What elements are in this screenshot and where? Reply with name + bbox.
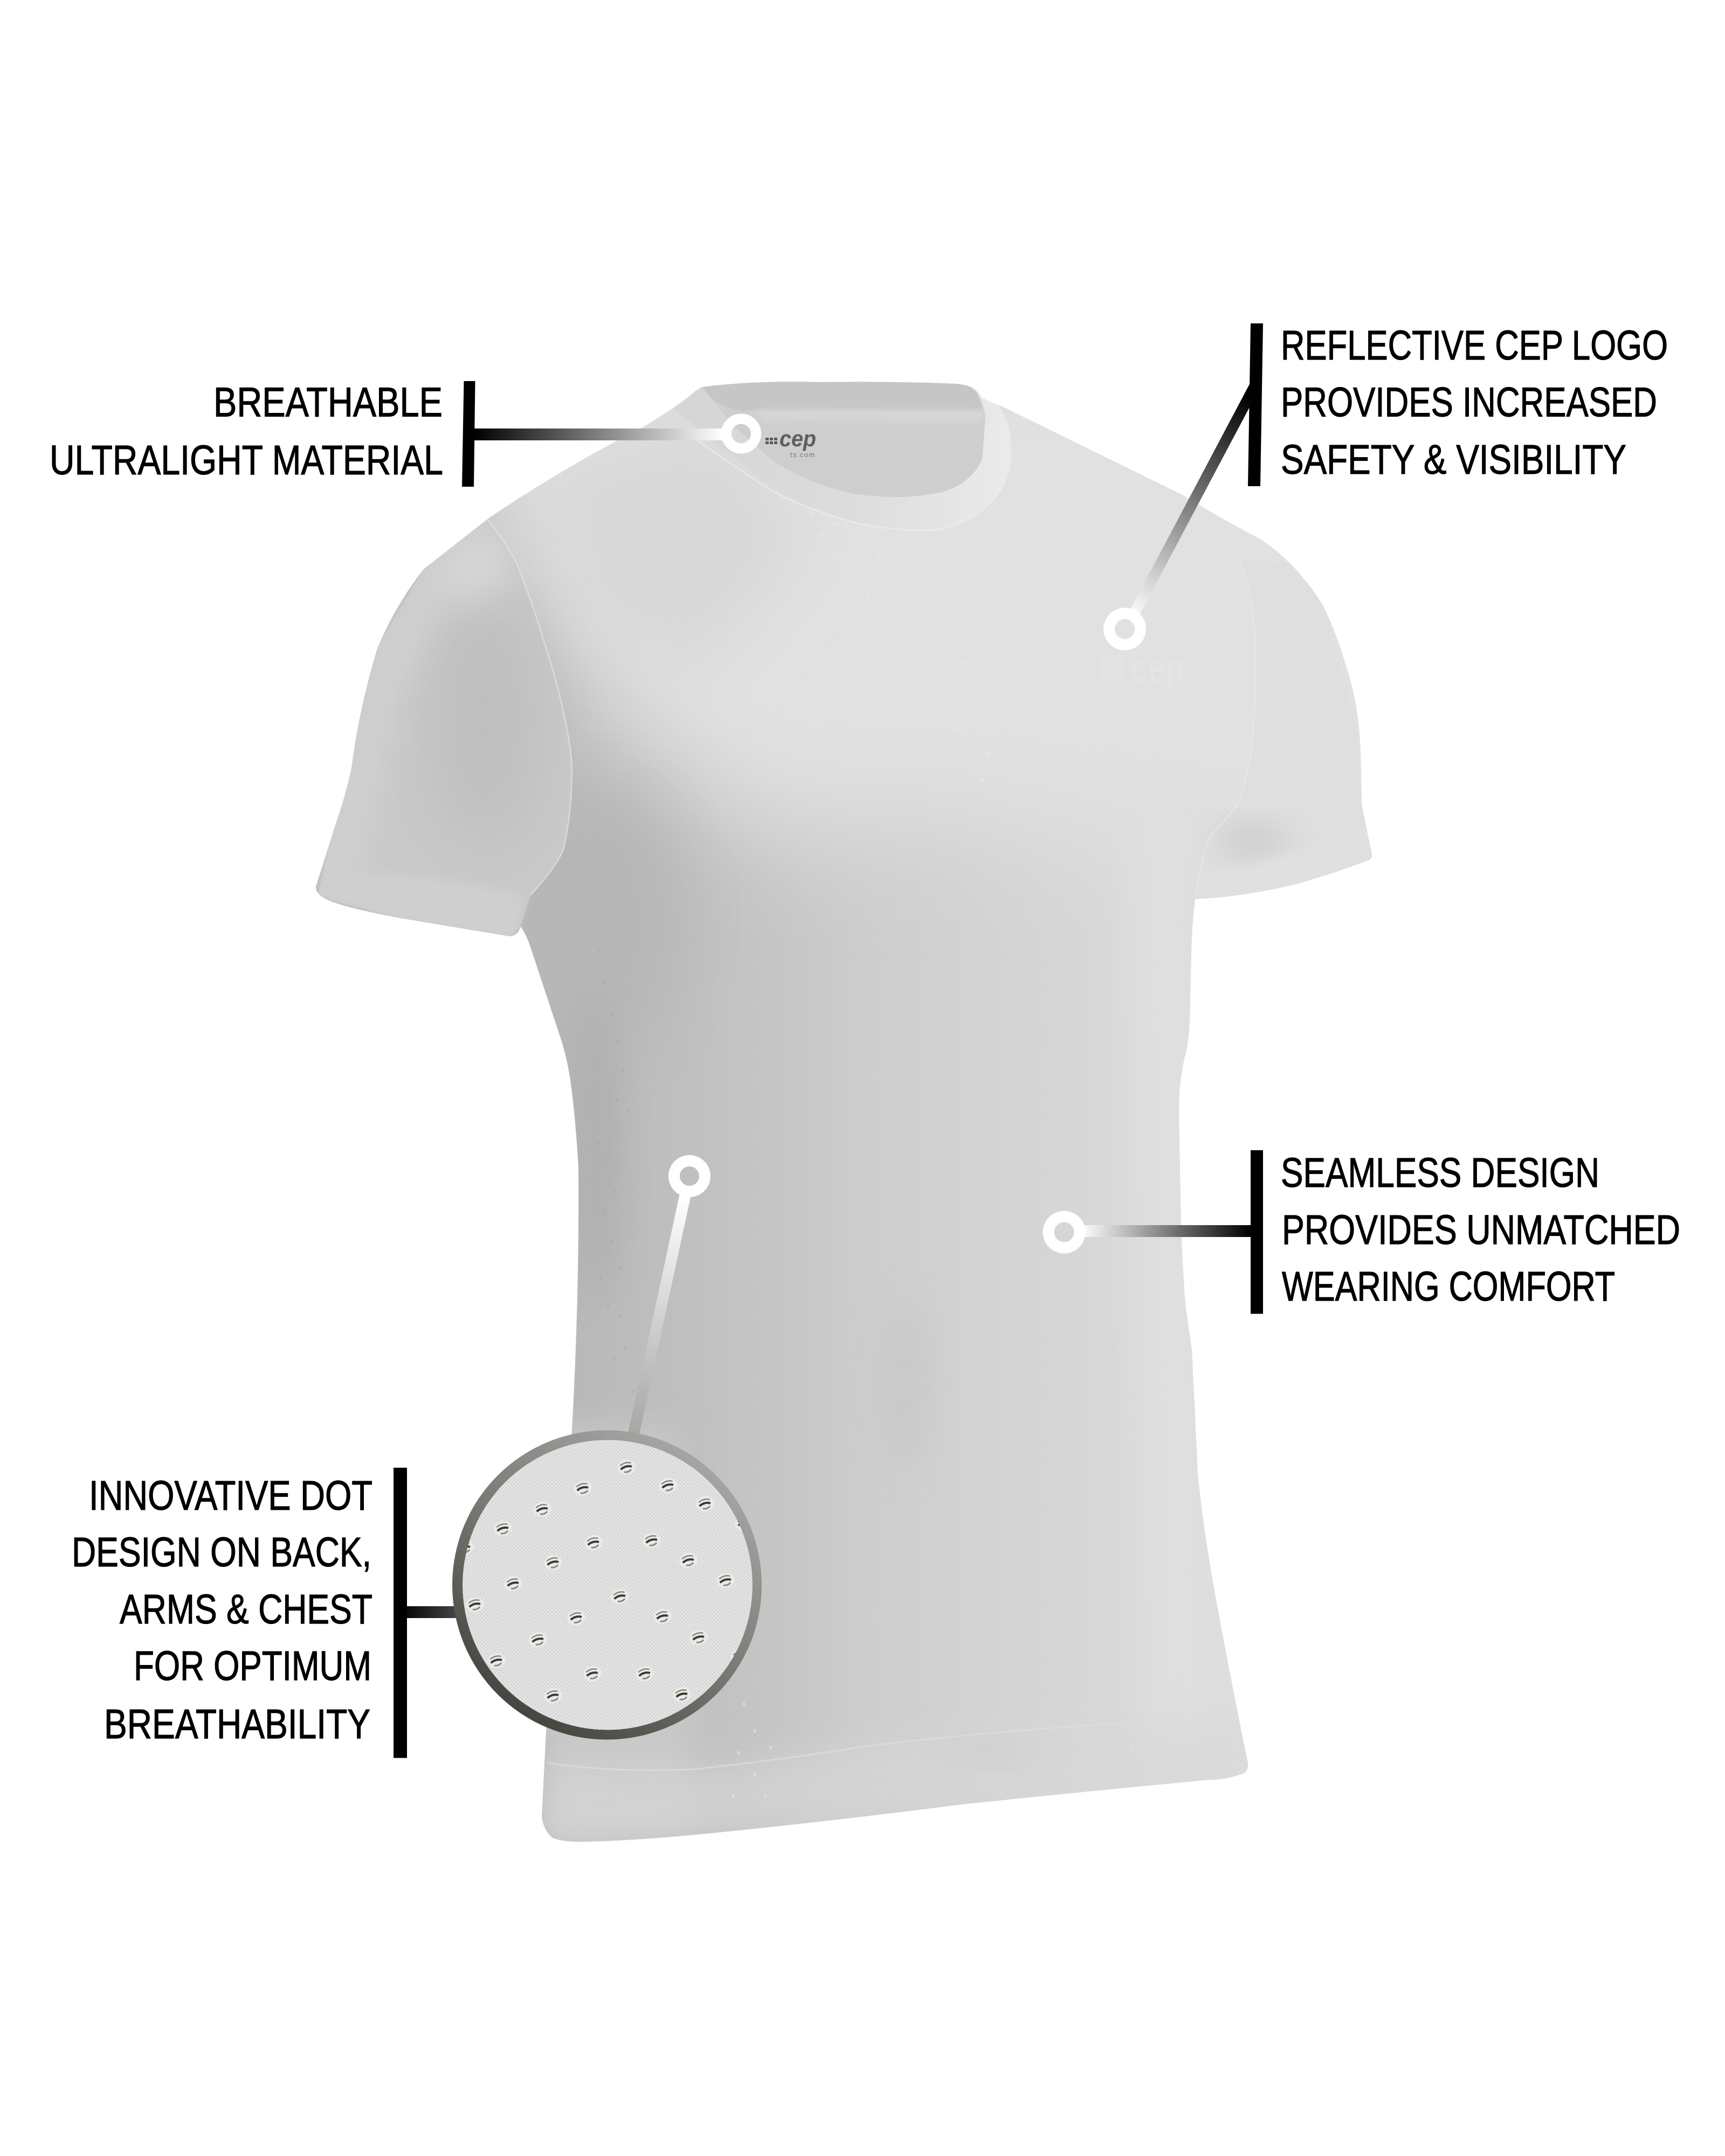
chest logo wordmark: cep — [1130, 646, 1184, 690]
hem dark fold — [938, 1741, 1035, 1763]
marker ring — [1109, 613, 1141, 645]
lower body light — [539, 1428, 701, 1843]
right sleeve cuff — [1195, 824, 1372, 899]
vertical bar — [1248, 323, 1263, 486]
chest perforations — [810, 513, 1029, 780]
armpit shadow — [539, 787, 679, 1046]
collar stitch line — [685, 431, 1004, 530]
label text — [1281, 322, 1668, 483]
marker ring — [674, 1161, 705, 1191]
vertical bar — [1251, 1150, 1263, 1314]
left sleeve cuff — [318, 868, 526, 938]
label text — [50, 379, 443, 483]
vertical bar — [462, 381, 475, 487]
callout: breathable ultralight material — [50, 379, 756, 487]
marker ring — [727, 419, 756, 448]
label text: BREATHABLE — [213, 379, 443, 426]
inside back neck — [702, 382, 985, 497]
sleeve seam right — [1195, 559, 1255, 896]
label text: FOR OPTIMUM — [134, 1643, 371, 1689]
label cep wordmark: cep — [779, 426, 816, 451]
label url: ts.com — [790, 451, 816, 459]
vertical bar — [394, 1468, 407, 1758]
magnifier ring — [452, 1431, 762, 1740]
shoulder tone — [602, 476, 743, 610]
callout: reflective CEP logo — [1109, 322, 1668, 645]
reflective chest logo — [1100, 646, 1184, 690]
upper chest highlight — [483, 385, 1126, 855]
label text — [72, 1473, 372, 1747]
label text: INNOVATIVE DOT — [89, 1473, 372, 1519]
callout: seamless design — [1048, 1150, 1680, 1314]
label grid icon — [765, 438, 777, 444]
marker ring — [1048, 1217, 1080, 1248]
hem line — [547, 1723, 1126, 1770]
sleeve seam left — [487, 520, 572, 895]
label text: BREATHABILITY — [104, 1701, 370, 1747]
connector to marker — [633, 1196, 685, 1435]
fabric texture — [454, 1440, 755, 1730]
connector line — [1133, 386, 1254, 616]
abdomen shadow — [879, 1299, 933, 1471]
perforation holes — [454, 1458, 755, 1705]
connector line — [1078, 1225, 1253, 1237]
right sleeve — [1195, 559, 1372, 899]
label text: ULTRALIGHT MATERIAL — [50, 437, 443, 483]
fabric detail magnifier — [452, 1431, 762, 1740]
label text: WEARING COMFORT — [1282, 1263, 1615, 1310]
horizontal connector — [404, 1606, 458, 1618]
back collar stitch band — [752, 410, 984, 421]
t-shirt illustration — [316, 382, 1372, 1842]
hem perforations — [733, 1566, 1184, 1796]
connector line — [473, 429, 724, 440]
left sleeve edge light — [318, 566, 453, 895]
label text — [1281, 1150, 1680, 1310]
side perforations — [598, 949, 633, 1392]
callout: innovative dot design — [72, 1161, 762, 1758]
label text: SAFETY & VISIBILITY — [1281, 437, 1626, 483]
label text: ARMS & CHEST — [120, 1586, 372, 1633]
shirt base shading — [270, 350, 1402, 1860]
label text: SEAMLESS DESIGN — [1281, 1150, 1599, 1196]
left sleeve core shadow — [431, 588, 539, 846]
back collar upper band — [702, 382, 982, 411]
right body highlight — [1127, 808, 1218, 1779]
chest logo grid icon — [1100, 658, 1123, 678]
left sleeve top light — [426, 520, 518, 609]
side shadow — [570, 1056, 614, 1266]
hem shading — [539, 1719, 1251, 1849]
right sleeve shadow — [1216, 825, 1291, 857]
left sleeve — [318, 520, 572, 938]
neck label logo — [765, 426, 816, 459]
front collar rib — [674, 387, 1011, 530]
label text: DESIGN ON BACK, — [72, 1529, 371, 1575]
